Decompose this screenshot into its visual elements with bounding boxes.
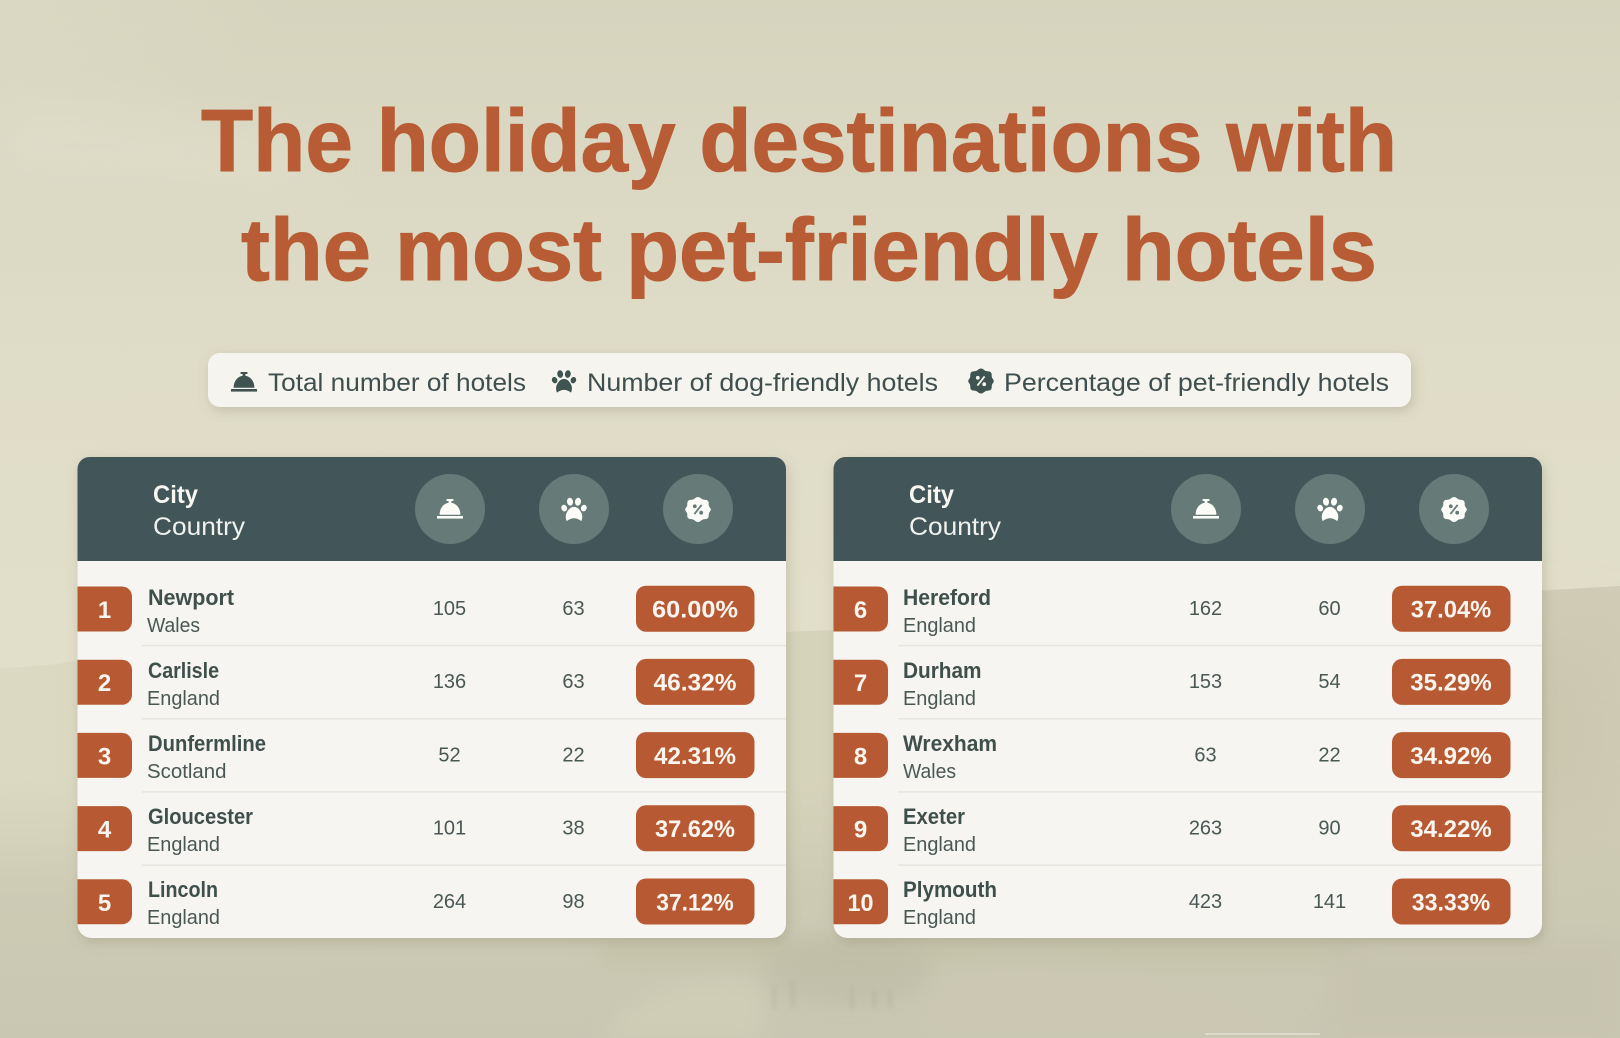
row 10: 33.33% [1412, 889, 1490, 916]
row 5: 5 [98, 890, 111, 917]
row 7: 153 [1189, 671, 1222, 693]
table header: Country [153, 513, 246, 541]
row 5 [78, 877, 754, 929]
row 9: Exeter [903, 804, 965, 829]
row 2: 46.32% [654, 670, 736, 697]
row 8: Wrexham [903, 731, 997, 756]
table header [834, 457, 1542, 561]
row 6: 6 [854, 597, 867, 624]
row 8: 22 [1318, 744, 1341, 766]
row 10: 423 [1189, 891, 1222, 913]
row 10: 141 [1313, 891, 1346, 913]
row 5: Lincoln [148, 877, 218, 902]
row 9: England [903, 834, 976, 856]
row 1: 60.00% [652, 596, 738, 624]
table header [78, 457, 786, 561]
row 8: 63 [1194, 744, 1217, 766]
row 3: 3 [98, 743, 111, 770]
title [201, 91, 1397, 299]
legend [208, 353, 1411, 407]
row 9: 9 [854, 817, 867, 844]
row 1: 63 [562, 598, 585, 620]
row 4: Gloucester [148, 804, 253, 829]
panel: ranks 1 to 5 [78, 457, 786, 938]
row 6: 162 [1189, 598, 1222, 620]
panel: ranks 6 to 10 [834, 457, 1542, 938]
icon: bell [415, 474, 485, 544]
row 6: Hereford [903, 585, 991, 610]
row 7: Durham [903, 658, 982, 683]
row 7 [834, 658, 1510, 710]
row 6: 37.04% [1411, 596, 1491, 624]
row 7: 7 [854, 670, 867, 697]
table header: City [909, 481, 954, 509]
row 2: 2 [98, 670, 111, 697]
row 1: 1 [98, 597, 111, 624]
row 3: 22 [562, 744, 585, 766]
icon: bell [1171, 474, 1241, 544]
row 1: 105 [433, 598, 466, 620]
row 7: England [903, 688, 976, 710]
row 9: 263 [1189, 818, 1222, 840]
legend item: percentage pet-friendly: Percentage of pet-friendly hotels [1004, 369, 1389, 397]
title: the most pet-friendly hotels [241, 200, 1377, 299]
row 3 [78, 731, 754, 783]
table header: Country [909, 513, 1002, 541]
row 4 [78, 804, 754, 856]
row 4: 37.62% [655, 816, 735, 843]
row 5: England [147, 907, 220, 929]
row 7: 54 [1318, 671, 1341, 693]
icon: paw [539, 474, 609, 544]
row 10: Plymouth [903, 877, 997, 902]
title: The holiday destinations with [201, 91, 1397, 190]
row 7: 35.29% [1410, 670, 1492, 697]
row 5: 37.12% [656, 889, 734, 916]
row 1: Wales [147, 615, 200, 637]
row 4: 4 [98, 817, 112, 844]
row 2: 136 [433, 671, 466, 693]
row 5: 98 [562, 891, 585, 913]
row 3: 42.31% [654, 743, 736, 770]
row 4: England [147, 834, 220, 856]
row 2: England [147, 688, 220, 710]
row 3: Scotland [147, 761, 226, 783]
row 8: 34.92% [1410, 743, 1492, 770]
row 6: England [903, 615, 976, 637]
row 9: 34.22% [1410, 816, 1492, 843]
row 8: Wales [903, 761, 956, 783]
row 4: 38 [562, 818, 585, 840]
row 2 [78, 658, 754, 710]
legend item: total hotels: Total number of hotels [268, 369, 526, 397]
legend item: dog-friendly hotels: Number of dog-friendly hotels [587, 369, 938, 397]
row 9: 90 [1318, 818, 1341, 840]
row 2: 63 [562, 671, 585, 693]
row 5: 264 [433, 891, 466, 913]
row 6 [834, 585, 1510, 637]
row 9 [834, 804, 1510, 856]
row 3: 52 [438, 744, 461, 766]
row 2: Carlisle [148, 658, 219, 683]
row 10: England [903, 907, 976, 929]
row 4: 101 [433, 818, 466, 840]
row 3: Dunfermline [148, 731, 266, 756]
icon: paw [1295, 474, 1365, 544]
row 8: 8 [854, 743, 867, 770]
icon: percent badge [663, 474, 733, 544]
row 10: 10 [848, 890, 874, 917]
icon: percent badge [1419, 474, 1489, 544]
row 6: 60 [1318, 598, 1341, 620]
row 1 [78, 585, 754, 637]
row 1: Newport [148, 585, 235, 610]
table header: City [153, 481, 198, 509]
row 10 [834, 877, 1510, 929]
row 8 [834, 731, 1510, 783]
